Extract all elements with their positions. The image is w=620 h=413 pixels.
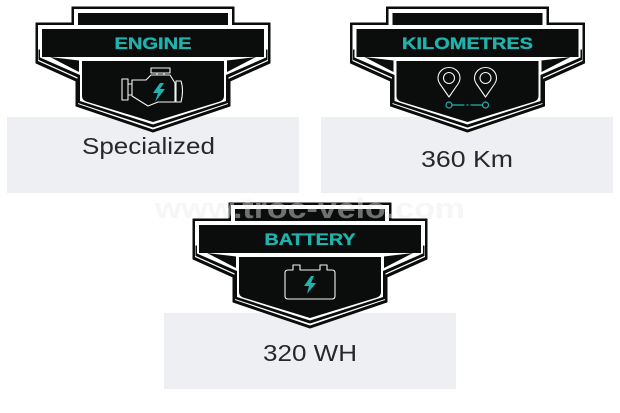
badge: battery xyxy=(193,203,427,328)
text: 360 Km: 360 Km xyxy=(421,146,513,172)
icon: battery xyxy=(285,265,335,299)
icon: map pins and route xyxy=(438,68,496,108)
panel: battery value xyxy=(164,313,456,389)
watermark: www.troc-velo.com xyxy=(154,193,465,225)
text: Specialized: Specialized xyxy=(82,133,215,159)
panel: kilometres value xyxy=(321,117,613,193)
text: 320 WH: 320 WH xyxy=(263,340,357,366)
icon: engine xyxy=(122,68,182,106)
heading: ENGINE: ENGINE xyxy=(114,35,192,53)
badge: kilometres xyxy=(350,7,584,132)
badge: engine xyxy=(36,7,270,132)
heading: KILOMETRES: KILOMETRES xyxy=(402,35,533,53)
heading: BATTERY: BATTERY xyxy=(265,231,355,249)
panel: engine value xyxy=(7,117,299,193)
